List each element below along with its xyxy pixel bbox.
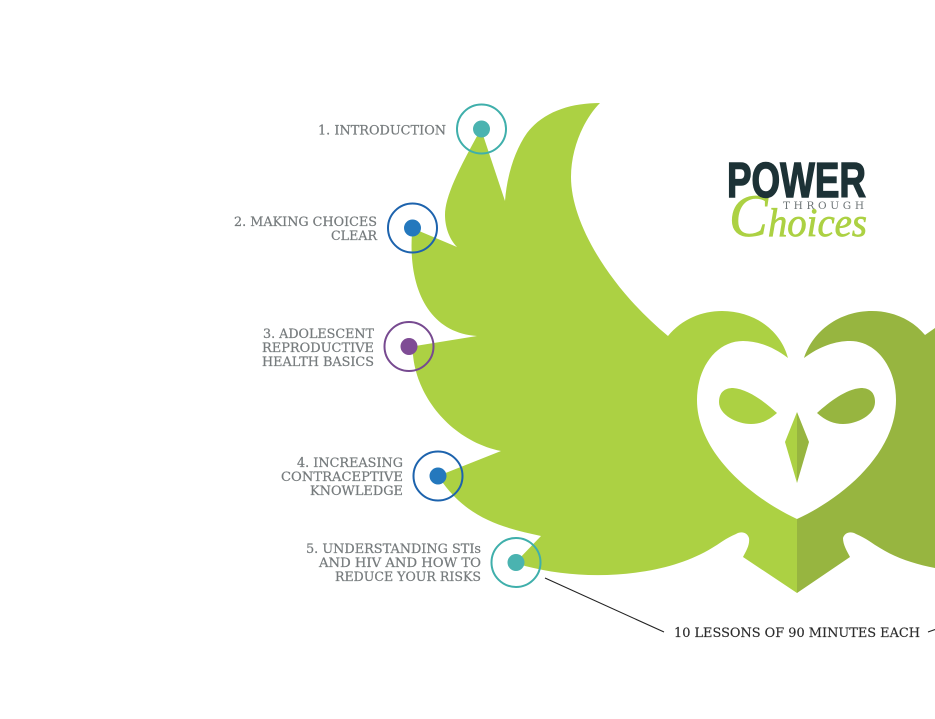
label: lesson 3: HEALTH BASICS bbox=[262, 355, 374, 370]
owl illustration bbox=[409, 103, 935, 593]
label: lesson 4: 4. INCREASING bbox=[297, 456, 403, 471]
owl left body and wing bbox=[409, 103, 797, 593]
label: lesson 5: REDUCE YOUR RISKS bbox=[335, 570, 481, 585]
label: lesson 1: 1. INTRODUCTION bbox=[318, 124, 446, 138]
label: lesson 3 bbox=[262, 327, 374, 370]
logo: Power Through Choices bbox=[727, 154, 867, 249]
lessons caption: 10 LESSONS OF 90 MINUTES EACH bbox=[674, 626, 920, 641]
connector line to lessons caption bbox=[545, 578, 935, 632]
label: lesson 4: CONTRACEPTIVE bbox=[281, 470, 403, 485]
left eye bbox=[719, 388, 777, 424]
label: lesson 5 bbox=[306, 542, 481, 585]
lesson marker 2 bbox=[388, 204, 437, 252]
lesson marker 4 bbox=[414, 452, 462, 500]
label: lesson 5: AND HIV AND HOW TO bbox=[318, 556, 481, 571]
label: lesson 2 bbox=[234, 215, 377, 244]
label: lesson 2: CLEAR bbox=[331, 229, 377, 244]
lesson marker 1 bbox=[457, 104, 506, 154]
logo word Choices: Choices bbox=[729, 183, 867, 249]
label: lesson 3: REPRODUCTIVE bbox=[262, 341, 374, 356]
right eye bbox=[817, 388, 875, 424]
label: lesson 2: 2. MAKING CHOICES bbox=[234, 215, 377, 230]
label: lesson 4: KNOWLEDGE bbox=[310, 484, 403, 499]
beak bbox=[785, 412, 809, 483]
owl right body in shadow bbox=[797, 311, 935, 593]
logo word POWER: POWER bbox=[727, 154, 866, 208]
label: lesson 3: 3. ADOLESCENT bbox=[263, 327, 374, 342]
label: lesson 5: 5. UNDERSTANDING STIs bbox=[306, 542, 481, 557]
lesson marker 3 bbox=[384, 322, 434, 371]
lesson marker 5 bbox=[492, 538, 540, 587]
label: lesson 4 bbox=[281, 456, 403, 499]
logo word THROUGH: THROUGH bbox=[783, 200, 864, 212]
